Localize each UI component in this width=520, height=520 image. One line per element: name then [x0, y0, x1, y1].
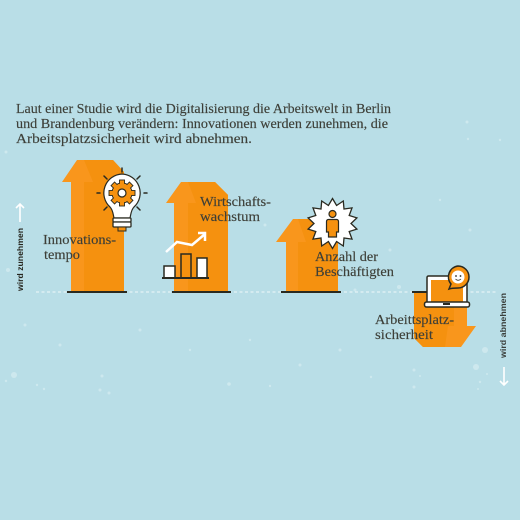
label: Innovationstempo: tempo — [44, 248, 80, 263]
icon: person in starburst — [308, 198, 357, 248]
label: Wirtschaftswachstum: Wirtschafts- — [200, 195, 271, 210]
label: Wirtschaftswachstum: wachstum — [200, 210, 260, 225]
headline text — [16, 102, 391, 147]
headline text: Laut einer Studie wird die Digitalisierung die Arbeitswelt in Berlin — [16, 102, 391, 117]
label: Arbeitsplatzsicherheit: sicherheit — [375, 328, 433, 343]
label: Anzahl der Beschäftigten: Beschäftigten — [315, 265, 394, 280]
item: Wirtschaftswachstum — [162, 182, 271, 293]
arrow up 2 — [166, 182, 231, 293]
axis label: wird abnehmen: wird abnehmen — [498, 293, 508, 359]
label: Anzahl der Beschäftigten: Anzahl der — [315, 250, 378, 265]
icon: bar chart with trend arrow — [162, 233, 209, 279]
label: Innovationstempo: Innovations- — [43, 233, 116, 248]
item: Arbeitsplatzsicherheit — [375, 266, 476, 347]
dashed zero line — [36, 291, 498, 293]
item: Anzahl der Beschäftigten — [276, 198, 394, 293]
item: Innovationstempo — [43, 160, 147, 293]
label: Arbeitsplatzsicherheit — [375, 313, 454, 343]
arrow up 3 — [276, 219, 341, 293]
icon: light bulb with gear — [97, 168, 147, 231]
label: Arbeitsplatzsicherheit: Arbeittsplatz- — [375, 313, 454, 328]
headline text: und Brandenburg verändern: Innovationen werden zunehmen, die — [16, 117, 388, 132]
axis label: wird zunehmen: wird zunehmen — [15, 228, 25, 292]
headline text: Arbeitsplatzsicherheit wird abnehmen. — [16, 132, 252, 147]
icon: laptop with smiley speech bubble — [424, 266, 470, 307]
label: Innovationstempo — [43, 233, 116, 263]
arrow up 1 — [62, 160, 127, 293]
arrow down 4 — [412, 291, 476, 347]
label: Anzahl der Beschäftigten — [315, 250, 394, 280]
axis label: wird abnehmen — [498, 293, 508, 385]
label: Wirtschaftswachstum — [200, 195, 271, 225]
